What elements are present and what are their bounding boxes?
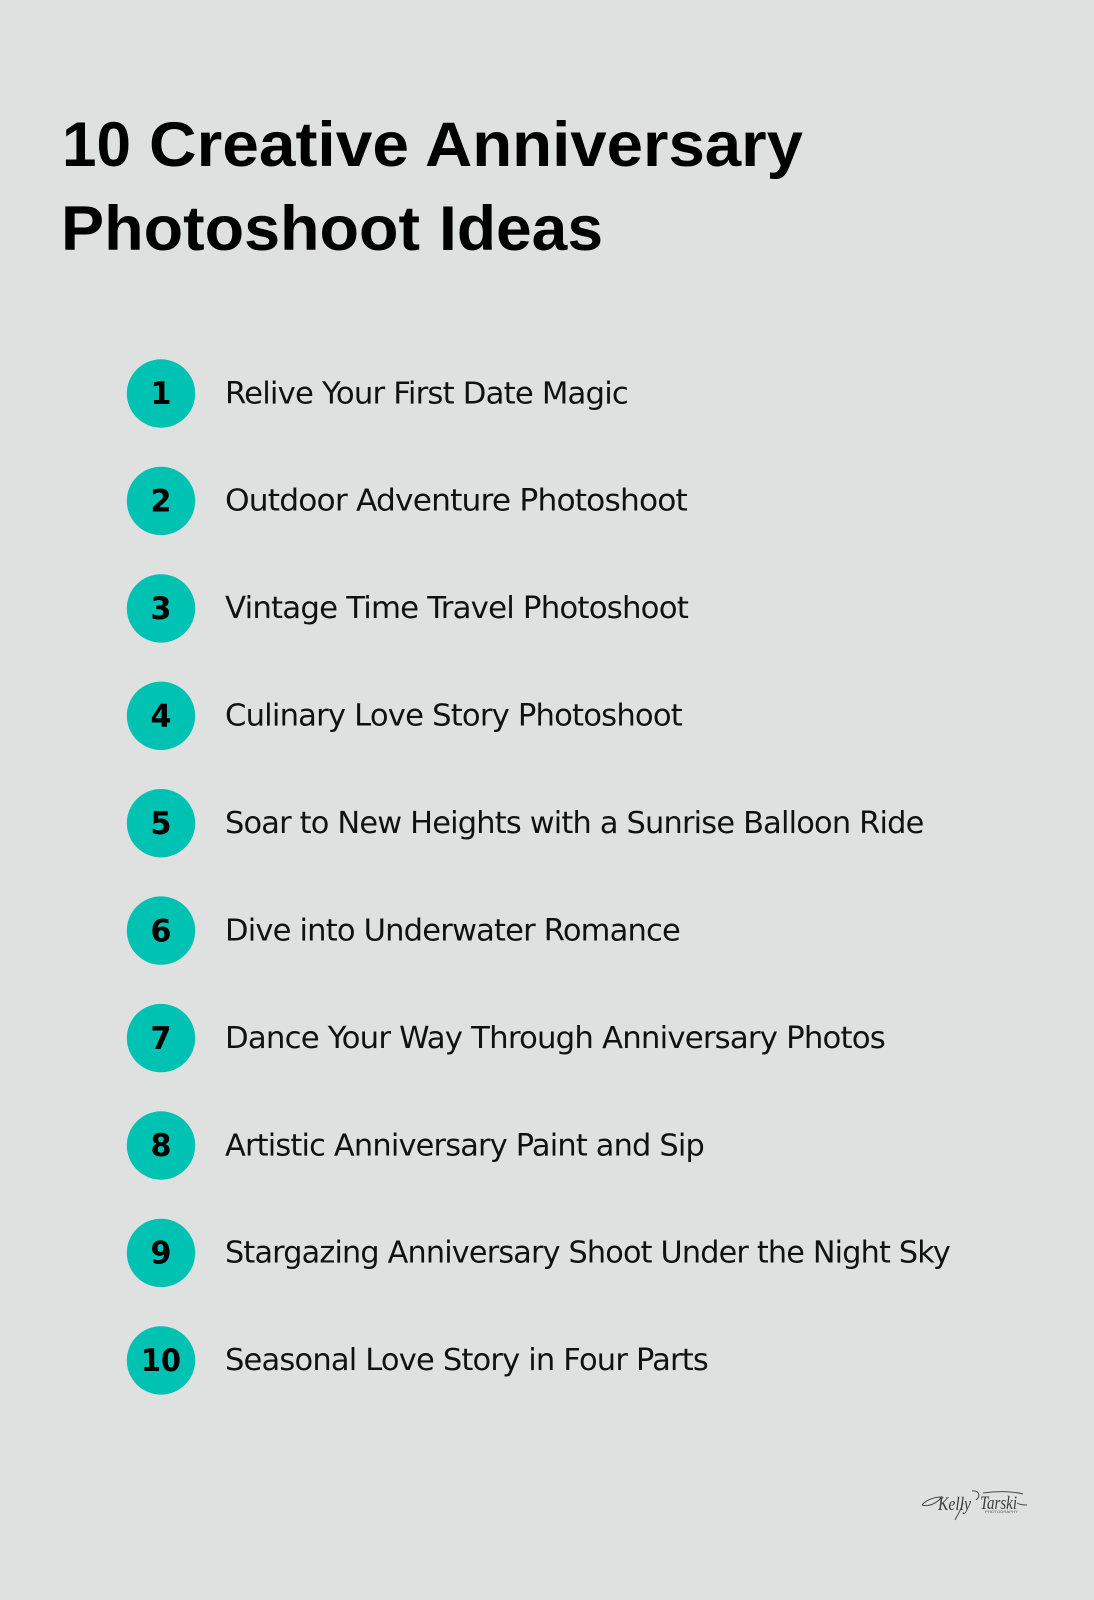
item 6 bbox=[127, 896, 680, 965]
item 9 bbox=[127, 1219, 950, 1287]
item 7: 7 bbox=[150, 1021, 172, 1057]
item 10 bbox=[127, 1326, 708, 1395]
item 1 bbox=[127, 359, 628, 428]
title: Anniversary bbox=[425, 110, 803, 180]
title: Creative bbox=[149, 110, 409, 180]
title: Photoshoot bbox=[61, 194, 420, 264]
signature logo: PHOTOGRAPHY bbox=[985, 1510, 1019, 1514]
item 3: Vintage Time Travel Photoshoot bbox=[225, 591, 689, 626]
item 1: Relive Your First Date Magic bbox=[225, 376, 628, 411]
item 6: 6 bbox=[150, 913, 172, 949]
signature logo: Kelly bbox=[937, 1494, 971, 1515]
item 7: Dance Your Way Through Anniversary Photos bbox=[225, 1021, 885, 1056]
item 8: 8 bbox=[150, 1128, 172, 1164]
item 3: 3 bbox=[150, 591, 172, 627]
item 5: 5 bbox=[150, 806, 172, 842]
list of ideas bbox=[127, 359, 950, 1395]
title: Ideas bbox=[439, 194, 603, 264]
title bbox=[61, 110, 803, 264]
item 6: Dive into Underwater Romance bbox=[225, 913, 680, 948]
item 4 bbox=[127, 682, 683, 750]
item 9: 9 bbox=[150, 1236, 172, 1272]
item 4: Culinary Love Story Photoshoot bbox=[225, 699, 683, 734]
item 4: 4 bbox=[150, 698, 172, 734]
title: 10 bbox=[62, 110, 131, 180]
item 7 bbox=[127, 1004, 885, 1072]
item 8: Artistic Anniversary Paint and Sip bbox=[225, 1128, 704, 1163]
item 1: 1 bbox=[150, 376, 172, 412]
item 9: Stargazing Anniversary Shoot Under the Night Sky bbox=[225, 1236, 950, 1271]
item 8 bbox=[127, 1111, 704, 1180]
item 10: 10 bbox=[141, 1343, 181, 1379]
signature logo bbox=[922, 1491, 1027, 1520]
signature logo: Tarski bbox=[980, 1493, 1017, 1514]
item 10: Seasonal Love Story in Four Parts bbox=[225, 1343, 708, 1378]
item 5: Soar to New Heights with a Sunrise Balloon Ride bbox=[225, 806, 924, 841]
item 2: Outdoor Adventure Photoshoot bbox=[225, 484, 688, 519]
item 2: 2 bbox=[150, 484, 172, 520]
item 2 bbox=[127, 467, 688, 535]
item 5 bbox=[127, 789, 924, 857]
item 3 bbox=[127, 574, 689, 643]
